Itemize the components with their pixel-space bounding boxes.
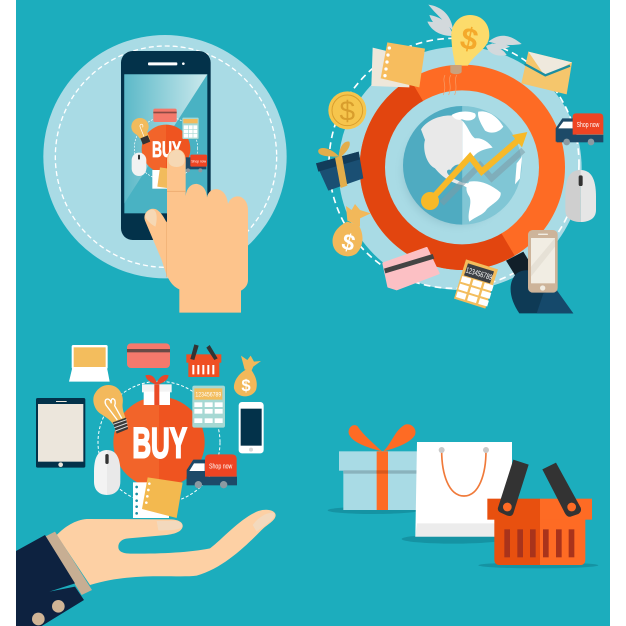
gift box bbox=[142, 375, 172, 405]
basket bbox=[487, 460, 592, 565]
panel: globe with magnifier bbox=[316, 5, 603, 313]
dashed circle bbox=[55, 46, 277, 267]
calculator: 123456789 bbox=[195, 391, 222, 398]
credit card bbox=[127, 343, 170, 368]
calculator: 123456789 bbox=[465, 266, 494, 282]
buy badge: BUY bbox=[132, 419, 187, 467]
calculator bbox=[454, 259, 498, 309]
open hand bbox=[57, 510, 276, 585]
south america bbox=[466, 181, 501, 222]
smartphone bbox=[528, 230, 558, 293]
greenland bbox=[478, 111, 503, 133]
tablet bbox=[36, 398, 85, 468]
smartphone bbox=[121, 51, 211, 240]
gift box bbox=[316, 141, 363, 191]
notepad bbox=[133, 477, 183, 518]
calculator bbox=[192, 386, 225, 428]
delivery truck: Shop now bbox=[209, 461, 233, 470]
pale circle backdrop bbox=[43, 35, 287, 278]
delivery truck bbox=[187, 454, 237, 488]
smartphone bbox=[239, 402, 264, 453]
shopping bag bbox=[415, 442, 512, 537]
laptop bbox=[69, 345, 110, 382]
credit card bbox=[383, 248, 439, 289]
gold coin: $ bbox=[340, 96, 356, 127]
buy badge bbox=[113, 397, 205, 488]
money bag: $ bbox=[339, 228, 358, 256]
money bag: $ bbox=[241, 376, 251, 395]
panel: hand holding buy icons bbox=[16, 343, 276, 626]
magnifier handle and hand holding phone bbox=[506, 230, 573, 313]
money bag bbox=[333, 204, 371, 256]
mini mouse bbox=[132, 153, 146, 176]
growth arrow bbox=[421, 132, 527, 210]
money bag bbox=[234, 356, 261, 396]
globe bbox=[393, 106, 522, 235]
mini buy badge: BUY bbox=[152, 137, 182, 162]
notepad bbox=[371, 42, 425, 87]
basket handles bbox=[498, 460, 581, 517]
shirt cuff bbox=[45, 532, 92, 595]
gold coin bbox=[328, 91, 366, 129]
light bulb bbox=[93, 385, 128, 434]
pale backdrop circle bbox=[338, 47, 582, 290]
delivery truck: Shop now bbox=[577, 122, 600, 129]
arctic islands bbox=[452, 112, 476, 121]
dashed ring bbox=[98, 381, 220, 503]
magnifier ring bbox=[360, 65, 565, 270]
dashed orbit bbox=[329, 38, 579, 288]
panel: hand tapping phone bbox=[43, 35, 287, 313]
gift box bbox=[339, 424, 418, 510]
delivery truck bbox=[556, 113, 603, 145]
winged bulb bbox=[427, 5, 522, 74]
phone screen icons bbox=[131, 109, 207, 189]
winged bulb: $ bbox=[457, 21, 481, 58]
mini truck: Shop now bbox=[191, 159, 207, 163]
mini notes bbox=[152, 167, 174, 189]
panel: gift, bag and basket bbox=[328, 424, 598, 568]
buttons bbox=[32, 600, 65, 625]
hand bbox=[144, 149, 248, 313]
north america bbox=[421, 115, 462, 185]
suit sleeve bbox=[16, 535, 84, 626]
mini calculator bbox=[182, 118, 199, 139]
shopping basket bbox=[186, 344, 221, 377]
computer mouse bbox=[94, 450, 120, 495]
mini credit card bbox=[153, 109, 177, 122]
ground shadows bbox=[328, 507, 598, 568]
computer mouse bbox=[565, 170, 596, 222]
mini light bulb bbox=[131, 118, 150, 145]
envelope bbox=[521, 52, 572, 94]
